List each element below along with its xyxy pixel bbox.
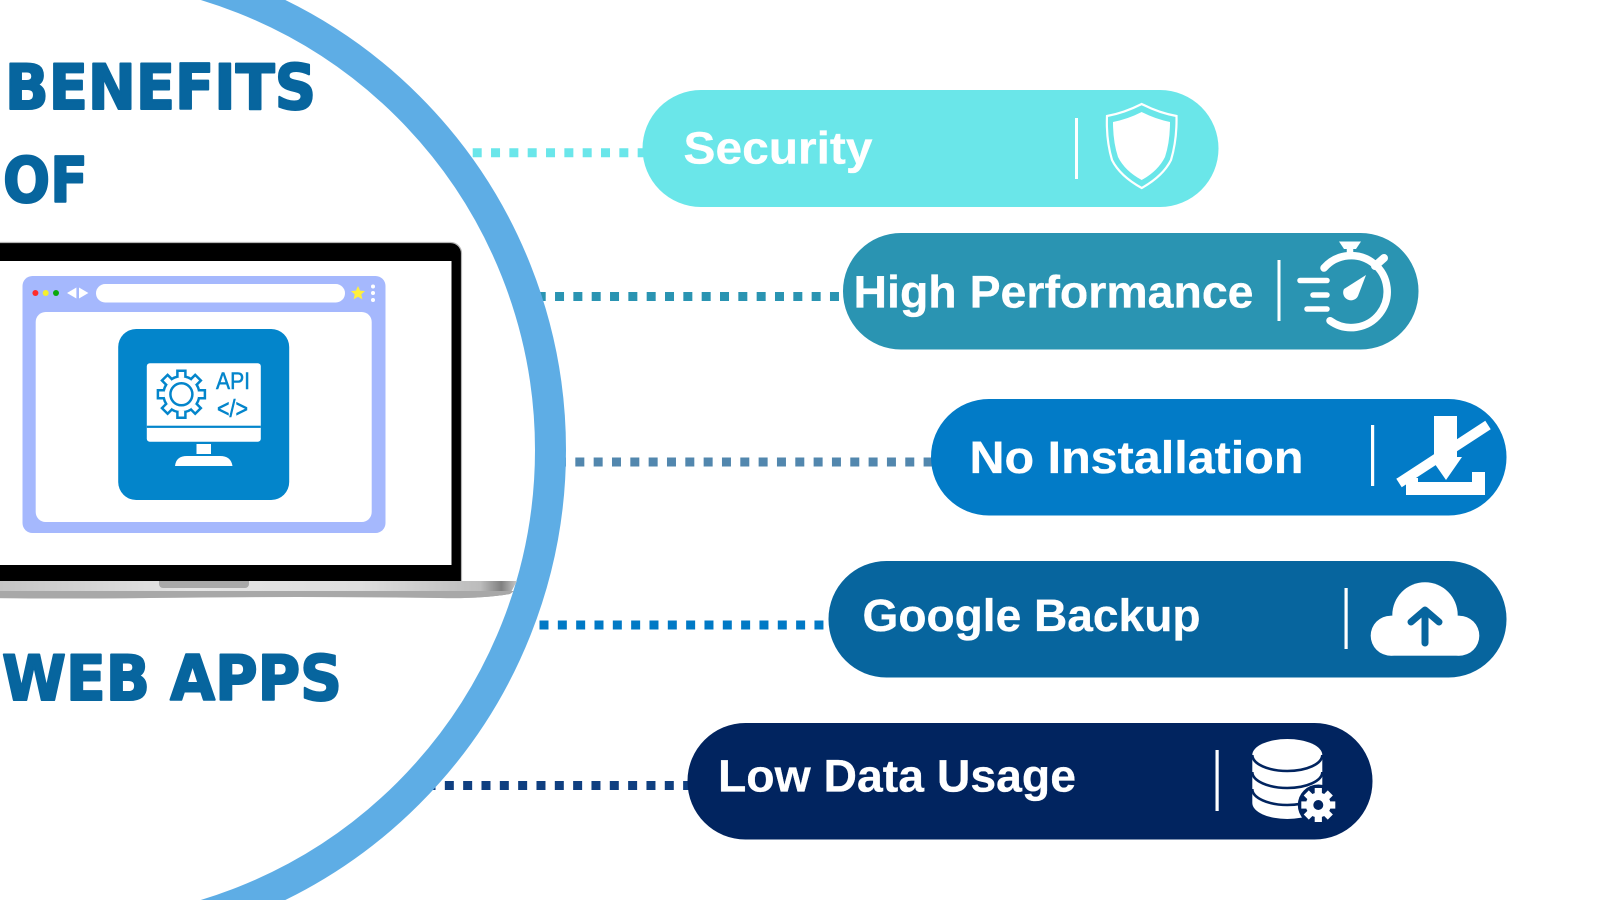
- browser window: [22, 276, 386, 533]
- pill body: [688, 723, 1372, 840]
- laptop screen frame: [0, 242, 462, 582]
- api label: API: [216, 368, 250, 395]
- connector: security: [473, 148, 646, 157]
- label: No Installation: [970, 432, 1304, 483]
- monitor stem: [196, 444, 211, 454]
- laptop display: [0, 261, 452, 565]
- separator: [1216, 750, 1219, 811]
- pill body: [931, 399, 1506, 516]
- title line: web apps: WEB APPS: [2, 642, 342, 715]
- title line: benefits: BENEFITS: [5, 51, 316, 124]
- window dots: [32, 290, 59, 296]
- pill: high performance: [843, 233, 1418, 350]
- pill body: [843, 233, 1418, 350]
- address bar: [96, 284, 345, 302]
- laptop base: [0, 581, 517, 598]
- pill: no installation: [931, 399, 1506, 516]
- menu dots: [371, 284, 375, 302]
- api tile: [118, 329, 289, 500]
- browser content area: [36, 312, 372, 522]
- icon: stopwatch: [1300, 242, 1387, 328]
- title line: of: OF: [3, 144, 88, 217]
- browser frame: [22, 276, 386, 533]
- connector: high performance: [537, 292, 846, 301]
- monitor divider: [147, 426, 261, 428]
- pill body: [642, 90, 1218, 207]
- title: benefits of: [3, 51, 316, 217]
- icon: shield: [1107, 104, 1177, 188]
- gear icon: [158, 371, 205, 418]
- tile background: [118, 329, 289, 500]
- connector: no installation: [557, 458, 935, 466]
- separator: [1278, 260, 1280, 321]
- pill: low data usage: [688, 723, 1372, 840]
- separator: [1371, 425, 1374, 486]
- star icon: [351, 286, 365, 299]
- connector: low data usage: [426, 781, 692, 790]
- nav arrows: [67, 288, 88, 298]
- code label: </>: [217, 395, 248, 423]
- icon: crossed-out download: [1399, 416, 1488, 495]
- connector: google backup: [540, 620, 832, 630]
- laptop notch: [159, 581, 249, 588]
- label: Low Data Usage: [718, 750, 1076, 802]
- icon: database with gear: [1252, 739, 1339, 826]
- separator: [1075, 118, 1078, 179]
- laptop illustration: [0, 242, 517, 598]
- pill: security: [642, 90, 1218, 207]
- separator: [1344, 588, 1348, 649]
- pill: google backup: [828, 561, 1506, 678]
- label: Security: [684, 122, 872, 174]
- icon: cloud upload: [1371, 582, 1479, 656]
- monitor screen: [147, 363, 261, 442]
- laptop base shadow: [0, 591, 514, 598]
- pill body: [828, 561, 1506, 678]
- monitor foot: [175, 456, 232, 466]
- circle ring: [0, 0, 550, 900]
- label: Google Backup: [862, 590, 1200, 641]
- label: High Performance: [854, 266, 1254, 318]
